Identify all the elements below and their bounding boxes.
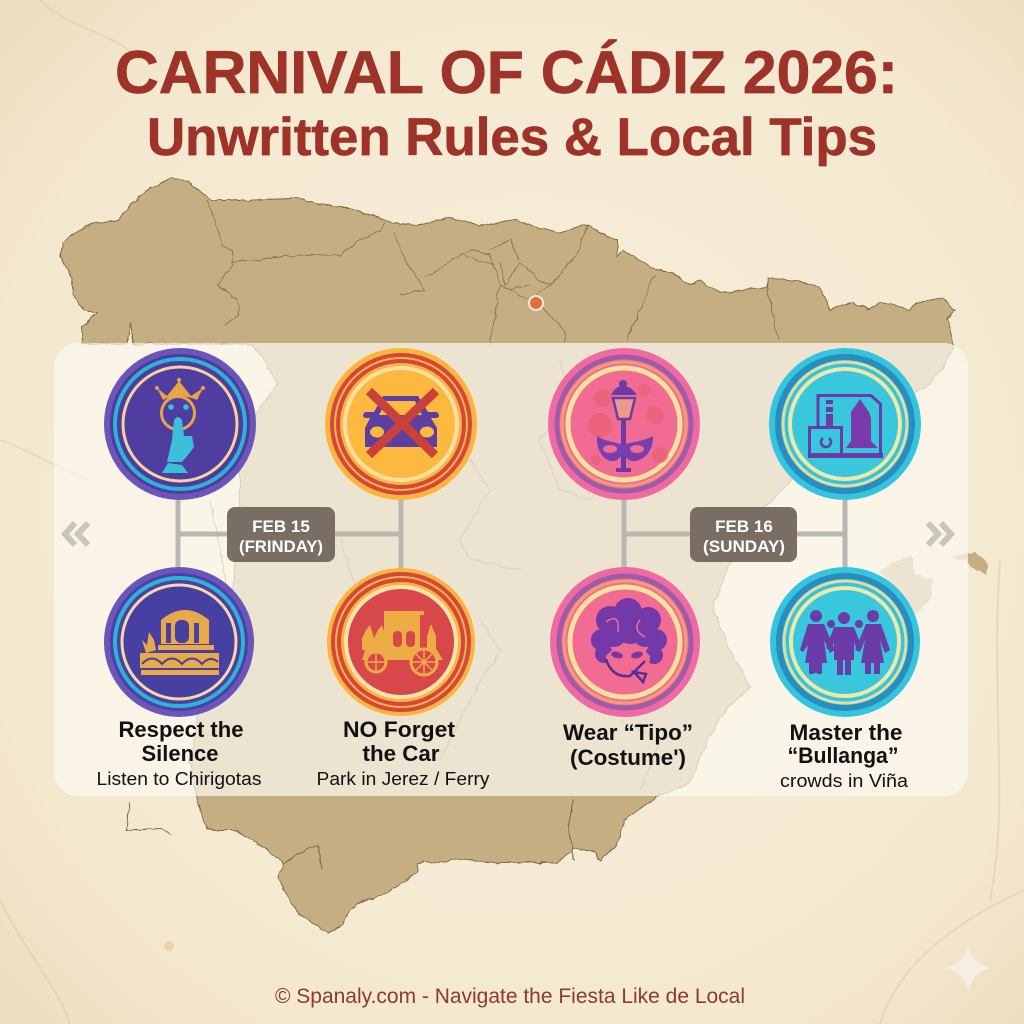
date badge: Feb 15: (FRINDAY) — [239, 537, 323, 556]
icon: map with castle tower — [769, 348, 921, 500]
icon: silence gesture — [104, 348, 256, 500]
connector lines — [178, 498, 845, 570]
rule 3 text: Wear “Tipo” — [563, 720, 693, 745]
rule 1 text: Silence — [142, 741, 218, 766]
left arrows — [65, 523, 88, 545]
title: CARNIVAL OF CÁDIZ 2026: — [115, 39, 898, 106]
rule 2 text: NO Forget — [343, 717, 456, 742]
rule 2 text — [316, 717, 490, 789]
icon: street lamp and mask — [548, 348, 700, 500]
rule 3 text: (Costume') — [570, 745, 686, 770]
rule 2 text: the Car — [362, 741, 440, 766]
icon: carriage — [327, 568, 475, 716]
rule 4 text — [780, 720, 909, 791]
date badge: Feb 15 — [227, 507, 335, 562]
map of Spain — [60, 178, 988, 933]
rule 4 text: Master the — [790, 720, 902, 745]
date badge: Feb 15: FEB 15 — [252, 517, 310, 536]
rule 1 text: Listen to Chirigotas — [96, 768, 262, 789]
icon: sparkle — [944, 944, 992, 992]
rule 4 text: “Bullanga” — [788, 743, 898, 768]
rule 2 text: Park in Jerez / Ferry — [316, 768, 490, 789]
title: Unwritten Rules & Local Tips — [147, 108, 877, 167]
date badge: Feb 16: (SUNDAY) — [703, 537, 785, 556]
right arrows — [928, 523, 951, 545]
icon: crossed-out car — [325, 348, 477, 500]
icon: palace float — [104, 567, 254, 717]
rule 1 text — [96, 717, 262, 789]
footer credit: © Spanaly.com - Navigate the Fiesta Like de Local — [275, 985, 745, 1008]
date badge: Feb 16: FEB 16 — [715, 517, 773, 536]
panel: rules — [54, 343, 968, 796]
rule 1 text: Respect the — [118, 717, 244, 742]
icon: three people crowd — [770, 567, 920, 717]
icon: curly wig and mask — [550, 567, 700, 717]
rule 3 text — [563, 720, 693, 770]
date badge: Feb 16 — [690, 507, 797, 562]
rule 4 text: crowds in Viña — [780, 770, 909, 791]
title — [115, 39, 898, 167]
